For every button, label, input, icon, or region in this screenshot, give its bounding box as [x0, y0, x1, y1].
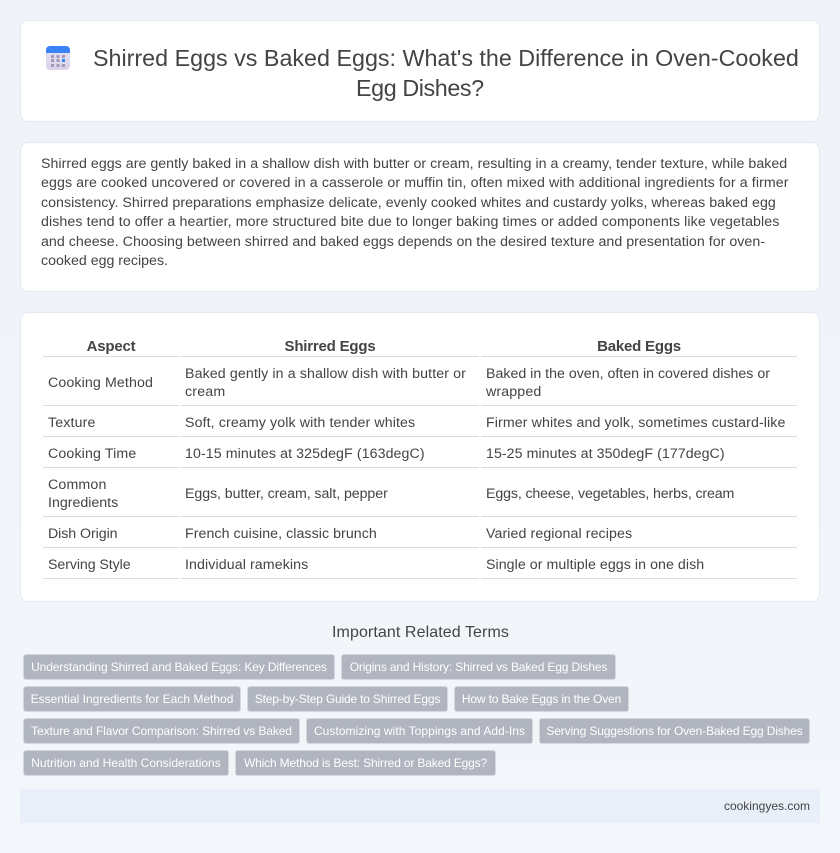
panel: summary	[20, 142, 820, 292]
panel: header	[20, 20, 820, 122]
comparison table: Baked in the oven, often in covered dishes or	[486, 366, 770, 382]
summary text	[41, 156, 789, 269]
summary text: consistency. Shirred preparations emphasize delicate, evenly cooked whites and custardy yolks, whereas baked egg	[41, 195, 776, 211]
comparison table: Varied regional recipes	[486, 526, 632, 542]
summary text: Shirred eggs are gently baked in a shallow dish with butter or cream, resulting in a creamy, tender texture, while baked	[41, 156, 787, 172]
comparison table: 10-15 minutes at 325degF (163degC)	[185, 446, 425, 462]
related term tags: Texture and Flavor Comparison: Shirred vs Baked	[31, 724, 292, 738]
footer bar	[20, 789, 820, 823]
panel: comparison	[20, 312, 820, 602]
summary text: cooked egg recipes.	[41, 253, 168, 269]
icon: calendar	[46, 46, 70, 70]
comparison table: Serving Style	[48, 557, 131, 573]
comparison table: Individual ramekins	[185, 557, 308, 573]
related term tags: Serving Suggestions for Oven-Baked Egg Dishes	[546, 724, 803, 738]
related term tags: Essential Ingredients for Each Method	[31, 692, 233, 706]
footer credit: cookingyes.com	[724, 799, 810, 813]
related term tags: How to Bake Eggs in the Oven	[462, 692, 621, 706]
related term tags: Origins and History: Shirred vs Baked Egg Dishes	[350, 660, 607, 674]
comparison table: Common	[48, 477, 107, 493]
comparison table: Texture	[48, 415, 96, 431]
comparison table: wrapped	[486, 384, 541, 400]
comparison table: cream	[185, 384, 225, 400]
comparison table: Cooking Time	[48, 446, 136, 462]
comparison table: Ingredients	[48, 495, 118, 511]
comparison table	[43, 338, 797, 579]
comparison table: French cuisine, classic brunch	[185, 526, 377, 542]
related term tags: Understanding Shirred and Baked Eggs: Key Differences	[31, 660, 327, 674]
summary text: and cheese. Choosing between shirred and baked eggs depends on the desired texture and presentation for oven-	[41, 234, 765, 250]
comparison table: Baked gently in a shallow dish with butter or	[185, 366, 466, 382]
related term tags: Step-by-Step Guide to Shirred Eggs	[255, 692, 440, 706]
comparison table: Aspect	[87, 338, 135, 355]
summary text: dishes tend to offer a heartier, more structured bite due to longer baking times or added components like vegetables	[41, 214, 780, 230]
title: Shirred Eggs vs Baked Eggs: What's the Difference in Oven-Cooked	[93, 45, 799, 71]
summary text: eggs are cooked uncovered or covered in a casserole or muffin tin, often mixed with additional ingredients for a firmer	[41, 175, 789, 191]
related term tags: Customizing with Toppings and Add-Ins	[314, 724, 525, 738]
comparison table: 15-25 minutes at 350degF (177degC)	[486, 446, 725, 462]
comparison table: Firmer whites and yolk, sometimes custard-like	[486, 415, 785, 431]
title	[93, 45, 799, 101]
comparison table: Eggs, butter, cream, salt, pepper	[185, 486, 388, 502]
comparison table: Cooking Method	[48, 375, 153, 391]
comparison table: Eggs, cheese, vegetables, herbs, cream	[486, 486, 734, 502]
related term tags: Which Method is Best: Shirred or Baked Eggs?	[244, 756, 487, 770]
comparison table: Soft, creamy yolk with tender whites	[185, 415, 415, 431]
title: Egg Dishes?	[356, 75, 484, 101]
comparison table: Baked Eggs	[597, 338, 681, 355]
related term tags	[23, 654, 810, 776]
comparison table: Dish Origin	[48, 526, 118, 542]
heading: related terms: Important Related Terms	[332, 624, 509, 641]
comparison table: Shirred Eggs	[285, 338, 375, 355]
related term tags: Nutrition and Health Considerations	[31, 756, 221, 770]
comparison table: Single or multiple eggs in one dish	[486, 557, 704, 573]
